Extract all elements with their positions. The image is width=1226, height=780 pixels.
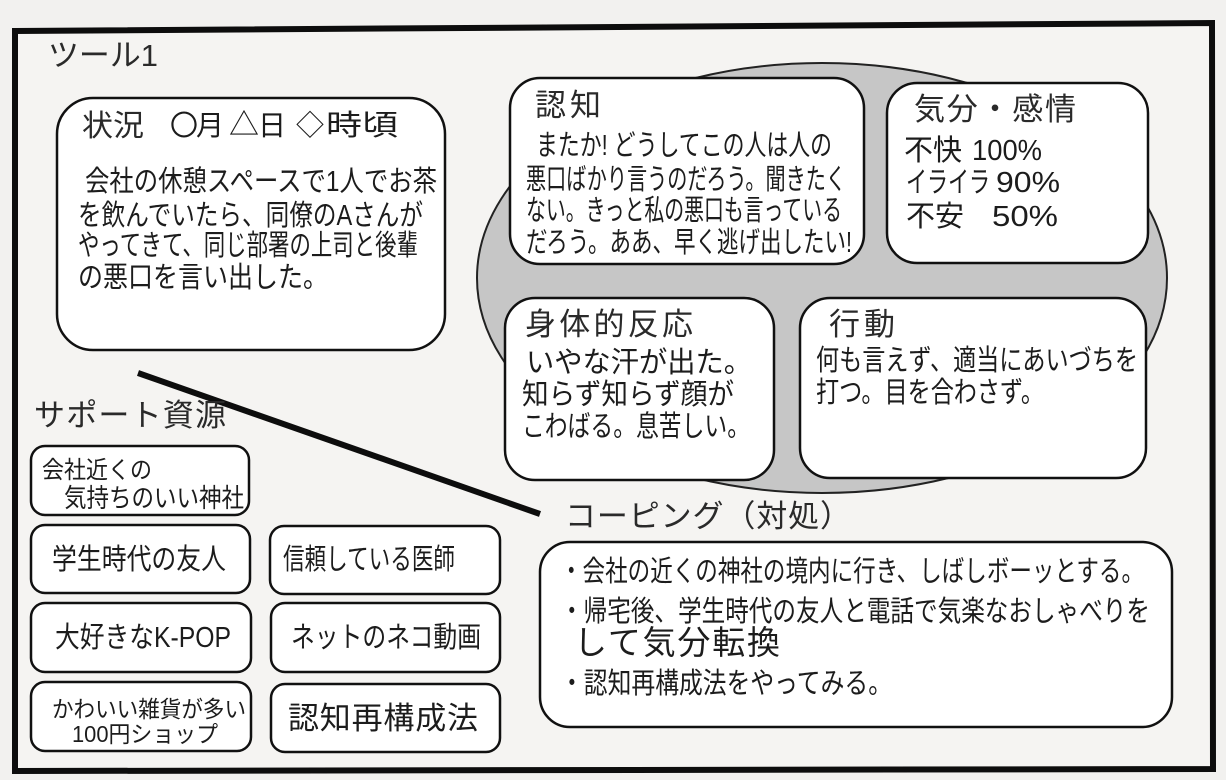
cognition text: 悪口ばかり言うのだろう。聞きたく — [526, 164, 846, 196]
mood ratings: 90% — [996, 167, 1060, 199]
situation heading: △ — [229, 109, 259, 142]
support: doctor: 信頼している医師 — [283, 543, 455, 576]
situation heading: 日 — [258, 110, 286, 141]
situation heading: 時頃 — [326, 109, 398, 142]
support: K-POP — [31, 603, 251, 672]
cognition text — [526, 130, 852, 259]
physical text: いやな汗が出た。 — [526, 346, 752, 379]
coping text: して気分転換 — [574, 624, 780, 661]
mood ratings: 50% — [992, 201, 1058, 233]
mood heading: 気分・感情 — [914, 92, 1076, 127]
panel: physical reaction — [505, 298, 774, 480]
support: student friend — [31, 525, 250, 593]
cognition text: ない。きっと私の悪口も言っている — [526, 194, 842, 227]
panel: situation — [57, 98, 445, 350]
coping heading: コーピング（対処） — [565, 499, 851, 534]
cognition text: またか! どうしてこの人は人の — [536, 130, 832, 162]
cognition heading: 認知 — [535, 88, 601, 123]
mood ratings — [904, 134, 1060, 233]
support: cat videos — [271, 603, 500, 672]
physical text — [522, 346, 752, 443]
support: 100 yen shop: かわいい雑貨が多い — [52, 696, 246, 722]
support: 100 yen shop: 100円ショップ — [72, 721, 218, 747]
physical text: 知らず知らず顔が — [522, 378, 734, 411]
physical heading: 身体的反応 — [525, 307, 693, 342]
coping text — [560, 555, 1150, 700]
situation text — [78, 165, 437, 294]
behavior text: 打つ。目を合わさず。 — [816, 376, 1044, 409]
situation heading: 月 — [196, 110, 224, 141]
support: cat videos: ネットのネコ動画 — [291, 621, 481, 654]
support heading: サポート資源 — [34, 398, 226, 433]
physical text: こわばる。息苦しい。 — [522, 410, 750, 443]
panel: support resources — [31, 446, 500, 752]
situation text: やってきて、同じ部署の上司と後輩 — [78, 229, 418, 262]
behavior text — [816, 344, 1138, 409]
support: student friend: 学生時代の友人 — [52, 543, 226, 576]
support: shrine: 気持ちのいい神社 — [64, 483, 244, 513]
behavior text: 何も言えず、適当にあいづちを — [816, 344, 1138, 377]
cognition text: だろう。ああ、早く逃げ出したい! — [526, 226, 852, 259]
panel: cognition — [510, 78, 864, 264]
support: doctor — [270, 526, 500, 594]
situation text: の悪口を言い出した。 — [78, 261, 328, 294]
mood ratings: 100% — [972, 135, 1042, 167]
behavior heading: 行動 — [829, 307, 895, 342]
panel: behavior — [800, 298, 1146, 478]
panel: coping — [540, 542, 1172, 727]
mood ratings: イライラ — [906, 167, 990, 199]
mood ratings: 不快 — [904, 134, 962, 167]
support: 100 yen shop — [31, 682, 251, 751]
support: shrine — [31, 446, 249, 515]
support: cognitive restructuring — [271, 684, 500, 752]
support: shrine: 会社近くの — [42, 457, 152, 484]
panel: gray ellipse — [477, 63, 1167, 493]
mood ratings: 不安 — [906, 200, 964, 233]
situation text: を飲んでいたら、同僚のAさんが — [78, 199, 423, 232]
panel: mood and emotion — [887, 83, 1148, 263]
support: K-POP: 大好きなK-POP — [55, 621, 231, 654]
situation text: 会社の休憩スペースで1人でお茶 — [85, 165, 437, 198]
situation heading: 状況 — [82, 110, 144, 143]
coping text: ・認知再構成法をやってみる。 — [560, 667, 892, 700]
situation heading — [82, 109, 398, 143]
situation heading: ◇ — [296, 110, 324, 141]
support: cognitive restructuring: 認知再構成法 — [288, 701, 478, 736]
situation heading: 〇 — [170, 110, 198, 141]
tool title: ツール1 — [48, 38, 158, 73]
arrow: connecting line — [138, 373, 540, 514]
